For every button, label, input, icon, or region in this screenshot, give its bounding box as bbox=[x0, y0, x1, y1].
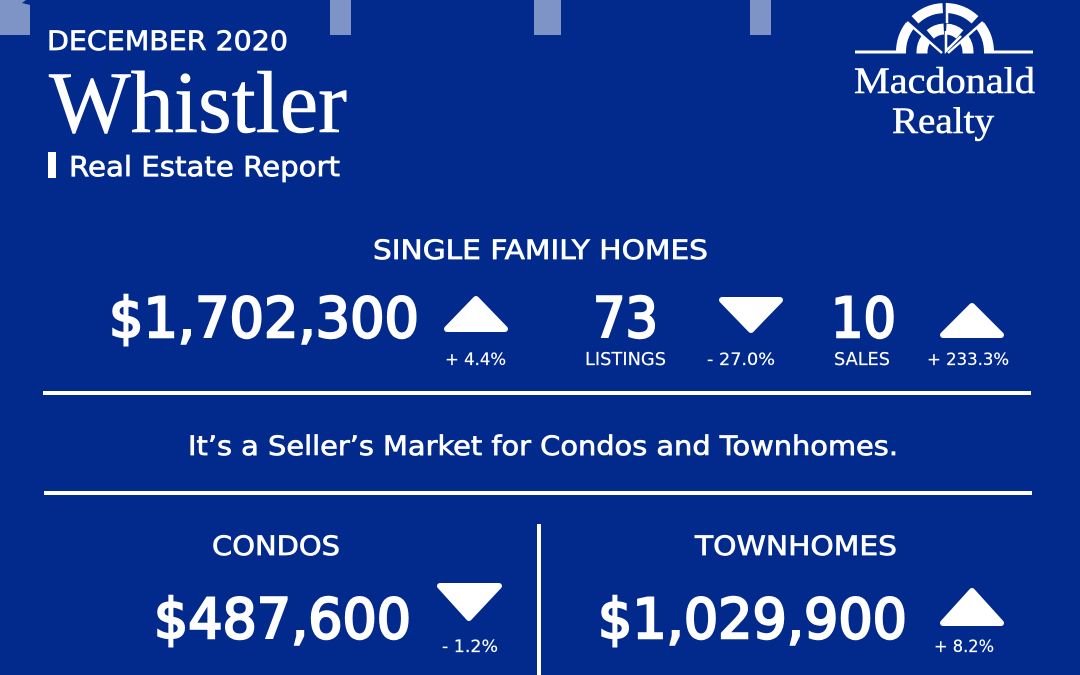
single family benchmark price: + 4.4% bbox=[445, 350, 506, 370]
panel: condos bbox=[154, 531, 499, 657]
logo emblem bbox=[855, 3, 1033, 54]
section heading: single family homes: SINGLE FAMILY HOMES bbox=[373, 235, 708, 266]
single family sales: SALES bbox=[834, 349, 890, 370]
single family listings bbox=[585, 286, 780, 370]
panel: townhomes: TOWNHOMES bbox=[694, 531, 897, 562]
panel: townhomes bbox=[598, 531, 1001, 657]
logo: Macdonald Realty: Realty bbox=[892, 101, 995, 142]
title: Whistler: Whistler bbox=[49, 55, 347, 152]
single family benchmark price bbox=[109, 286, 506, 370]
logo: Macdonald Realty bbox=[854, 3, 1036, 142]
single family listings: 73 bbox=[593, 286, 658, 350]
market summary statement: It’s a Seller’s Market for Condos and Townhomes. bbox=[188, 431, 898, 462]
single family sales: 10 bbox=[831, 286, 896, 350]
single family listings: - 27.0% bbox=[707, 350, 775, 370]
panel: condos: $487,600 bbox=[154, 587, 411, 651]
single family benchmark price: $1,702,300 bbox=[109, 286, 419, 350]
icon: sales up arrow bbox=[943, 306, 1001, 335]
icon: price up arrow bbox=[447, 299, 505, 329]
report date heading: DECEMBER 2020 bbox=[47, 26, 288, 57]
single family sales bbox=[831, 286, 1009, 370]
subtitle with bar marker: Real Estate Report bbox=[69, 150, 340, 183]
logo wordmark: Macdonald bbox=[854, 61, 1036, 102]
panel: townhomes: $1,029,900 bbox=[598, 587, 907, 651]
panel: condos: - 1.2% bbox=[442, 637, 498, 657]
icon: condos down arrow bbox=[440, 586, 499, 618]
single family listings: LISTINGS bbox=[585, 349, 666, 370]
single family sales: + 233.3% bbox=[927, 350, 1009, 370]
panel: townhomes: + 8.2% bbox=[934, 637, 994, 657]
icon: listings down arrow bbox=[722, 300, 780, 330]
panel: condos: CONDOS bbox=[212, 531, 340, 562]
cropped light tabs at top edge bbox=[0, 0, 771, 35]
icon: townhomes up arrow bbox=[943, 591, 1001, 623]
